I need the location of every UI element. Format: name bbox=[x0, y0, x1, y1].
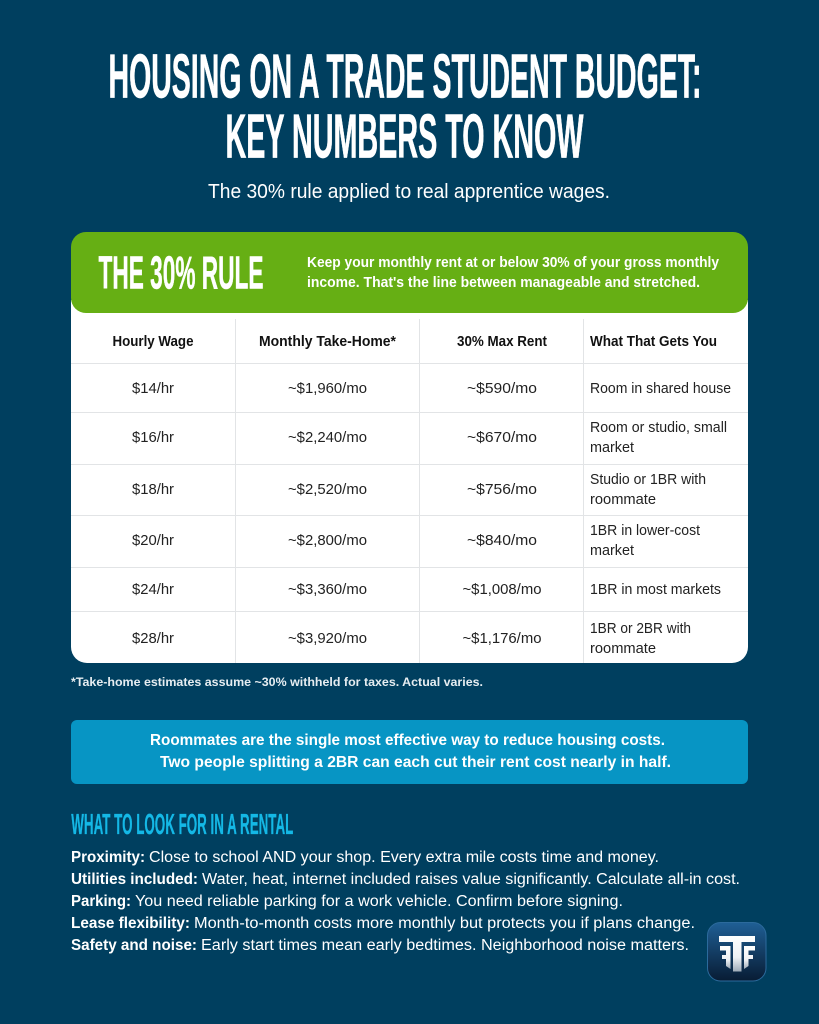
panel: 30% rule banner bbox=[71, 232, 748, 313]
row: $20/hr: $20/hr bbox=[132, 533, 174, 549]
item: proximity: Close to school AND your shop. Every extra mile costs time and money. bbox=[149, 849, 659, 866]
row: $24/hr bbox=[132, 582, 721, 598]
icon: TTF logo bbox=[708, 922, 766, 981]
item: safety and noise: Early start times mean early bedtimes. Neighborhood noise matters. bbox=[201, 937, 689, 954]
table header row bbox=[112, 334, 717, 350]
row: $18/hr: ~$756/mo bbox=[467, 482, 537, 498]
row: $16/hr: market bbox=[590, 440, 634, 456]
row: $14/hr: ~$1,960/mo bbox=[288, 381, 367, 397]
callout: roommates bbox=[71, 720, 748, 784]
table header row: Hourly Wage bbox=[112, 334, 194, 350]
title bbox=[108, 42, 702, 172]
row: $28/hr: roommate bbox=[590, 641, 656, 657]
row: $28/hr bbox=[132, 621, 691, 657]
item: lease flexibility: Lease flexibility: bbox=[71, 915, 190, 932]
row: $24/hr: 1BR in most markets bbox=[590, 582, 721, 598]
table header row: Monthly Take-Home* bbox=[259, 334, 396, 350]
row: $20/hr: ~$2,800/mo bbox=[288, 533, 367, 549]
item: proximity: Proximity: bbox=[71, 849, 145, 866]
row: $20/hr: market bbox=[590, 543, 634, 559]
panel: 30% rule banner: THE 30% RULE bbox=[98, 246, 264, 298]
footnote: *Take-home estimates assume ~30% withheld for taxes. Actual varies. bbox=[71, 675, 483, 689]
row: $28/hr: ~$3,920/mo bbox=[288, 631, 367, 647]
row: $16/hr bbox=[132, 420, 727, 456]
subtitle: The 30% rule applied to real apprentice wages. bbox=[208, 181, 610, 203]
row: $16/hr: Room or studio, small bbox=[590, 420, 727, 436]
rental checklist bbox=[71, 849, 740, 954]
item: parking: Parking: bbox=[71, 893, 131, 910]
row: $20/hr bbox=[132, 523, 700, 559]
row: $16/hr: ~$670/mo bbox=[467, 430, 537, 446]
item: utilities: Utilities included: bbox=[71, 871, 198, 888]
row: $16/hr: $16/hr bbox=[132, 430, 174, 446]
item: utilities: Water, heat, internet included raises value significantly. Calculate all-in cost. bbox=[202, 871, 740, 888]
panel: rent table bbox=[71, 300, 748, 663]
row: $14/hr: Room in shared house bbox=[590, 381, 731, 397]
row: $14/hr bbox=[132, 381, 731, 397]
row: $28/hr: $28/hr bbox=[132, 631, 174, 647]
row: $24/hr: ~$1,008/mo bbox=[462, 582, 542, 598]
row: $16/hr: ~$2,240/mo bbox=[288, 430, 367, 446]
row: $18/hr: roommate bbox=[590, 492, 656, 508]
table header row: What That Gets You bbox=[590, 334, 717, 350]
row: $20/hr: 1BR in lower-cost bbox=[590, 523, 700, 539]
row: $20/hr: ~$840/mo bbox=[467, 533, 537, 549]
row: $28/hr: 1BR or 2BR with bbox=[590, 621, 691, 637]
row: $18/hr bbox=[132, 472, 706, 508]
row: $18/hr: $18/hr bbox=[132, 482, 174, 498]
item: lease flexibility: Month-to-month costs more monthly but protects you if plans change. bbox=[194, 915, 695, 932]
table header row: 30% Max Rent bbox=[457, 334, 547, 350]
callout: roommates: Roommates are the single most effective way to reduce housing costs. bbox=[150, 732, 665, 749]
item: parking: You need reliable parking for a work vehicle. Confirm before signing. bbox=[135, 893, 623, 910]
row: $14/hr: $14/hr bbox=[132, 381, 174, 397]
row: $24/hr: ~$3,360/mo bbox=[288, 582, 367, 598]
banner description: income. That's the line between manageable and stretched. bbox=[307, 275, 700, 291]
callout: roommates: Two people splitting a 2BR can each cut their rent cost nearly in half. bbox=[160, 754, 671, 771]
banner description bbox=[307, 255, 719, 291]
row: $14/hr: ~$590/mo bbox=[467, 381, 537, 397]
row: $28/hr: ~$1,176/mo bbox=[462, 631, 542, 647]
row: $18/hr: Studio or 1BR with bbox=[590, 472, 706, 488]
row: $24/hr: $24/hr bbox=[132, 582, 174, 598]
item: safety and noise: Safety and noise: bbox=[71, 937, 197, 954]
row: $18/hr: ~$2,520/mo bbox=[288, 482, 367, 498]
banner description: Keep your monthly rent at or below 30% of your gross monthly bbox=[307, 255, 719, 271]
text: WHAT TO LOOK FOR IN A RENTAL bbox=[71, 809, 293, 841]
